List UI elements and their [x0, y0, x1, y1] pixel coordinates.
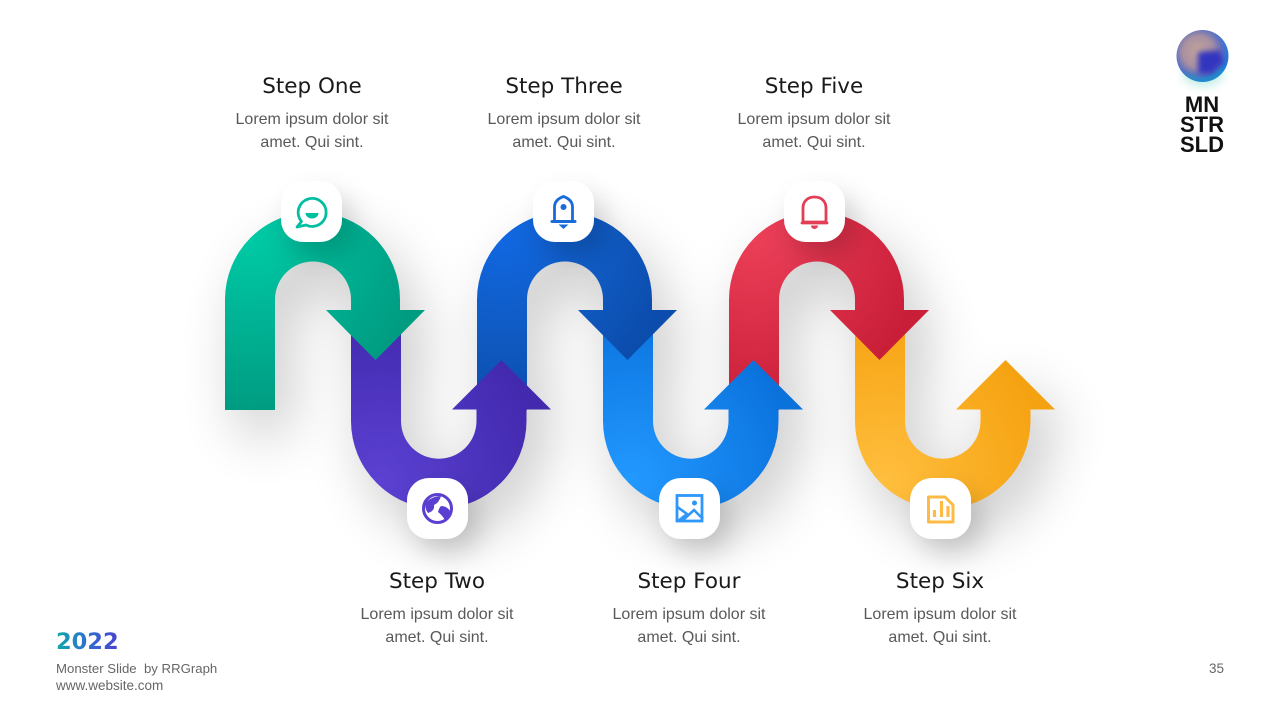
step three text: Step Three — [505, 74, 623, 99]
icon tile: globe — [407, 478, 468, 539]
step six text: Lorem ipsum dolor sit — [864, 606, 1016, 623]
step one text: Step One — [262, 74, 362, 99]
step six text: Step Six — [896, 569, 984, 594]
step four text — [613, 569, 766, 646]
step five text: Lorem ipsum dolor sit — [738, 111, 890, 128]
arrow: step three blue — [477, 212, 677, 410]
step two text: amet. Qui sint. — [385, 629, 489, 646]
icon tile: rocket bell — [533, 181, 594, 242]
icon tile: bell — [784, 181, 845, 242]
footer credit: www.website.com — [56, 678, 163, 692]
arrow: step five red — [729, 212, 929, 410]
step two text: Lorem ipsum dolor sit — [361, 606, 513, 623]
step one text: Lorem ipsum dolor sit — [236, 111, 388, 128]
step five text — [738, 74, 890, 151]
logo globe — [1176, 30, 1228, 86]
arrow: step six yellow — [855, 310, 1055, 509]
icon tile: speech bubble — [281, 181, 342, 242]
step five text: amet. Qui sint. — [762, 134, 866, 151]
footer credit: Monster Slide by RRGraph — [56, 661, 217, 676]
step four text: Lorem ipsum dolor sit — [613, 606, 765, 623]
step six text — [864, 569, 1016, 646]
step two text — [361, 569, 514, 646]
icon tile: picture — [659, 478, 720, 539]
logo wordmark: STR — [1180, 112, 1224, 137]
step one text — [236, 74, 388, 151]
arrow: step one green — [225, 212, 425, 410]
arrow: step four light blue — [603, 310, 803, 509]
step five text: Step Five — [765, 74, 863, 99]
icon tile: chart document — [910, 478, 971, 539]
page number: 35 — [1209, 661, 1224, 676]
step three text: amet. Qui sint. — [512, 134, 616, 151]
step two text: Step Two — [389, 569, 485, 594]
arrow: step two purple — [351, 310, 551, 509]
step four text: amet. Qui sint. — [637, 629, 741, 646]
footer credit — [56, 661, 217, 692]
step three text — [488, 74, 640, 151]
step six text: amet. Qui sint. — [888, 629, 992, 646]
step three text: Lorem ipsum dolor sit — [488, 111, 640, 128]
logo wordmark: MN — [1185, 92, 1219, 117]
year: 2022 — [56, 629, 119, 655]
step four text: Step Four — [637, 569, 740, 594]
step one text: amet. Qui sint. — [260, 134, 364, 151]
logo wordmark — [1180, 92, 1224, 157]
logo wordmark: SLD — [1180, 132, 1224, 157]
